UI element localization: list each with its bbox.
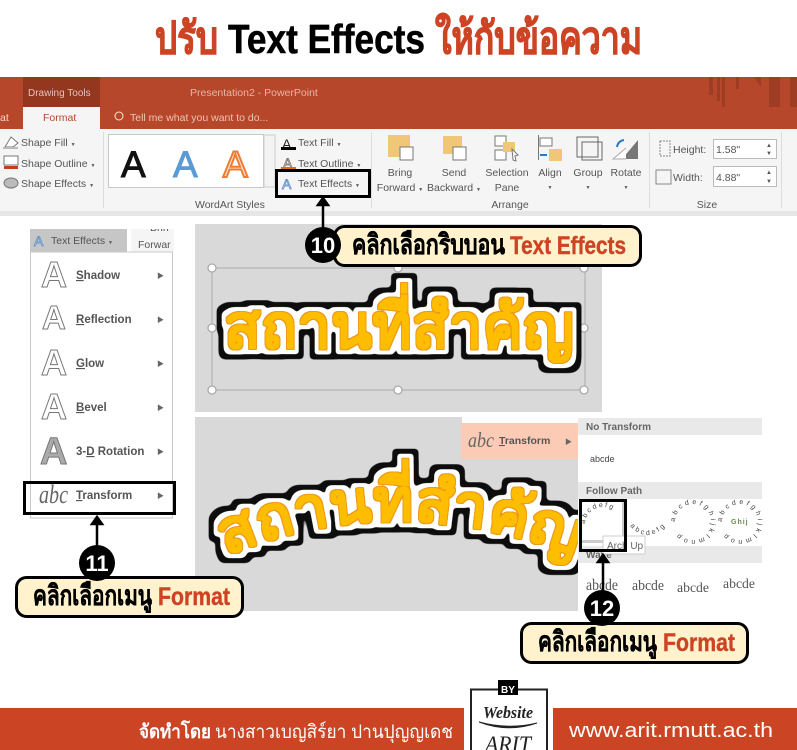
size group: ▲ [766, 170, 772, 176]
logo: Website ARIT badge [471, 680, 547, 750]
footer bar: จัดทำโดย [139, 720, 211, 743]
ribbon: PowerPoint Drawing Tools: at [0, 112, 9, 124]
size group: 1.58" [716, 144, 740, 156]
ribbon: PowerPoint Drawing Tools: Tell me what you want to do... [130, 112, 268, 124]
text fill, outline and effects commands: Text Fill ▼ [298, 137, 341, 149]
panel: Transform gallery: abcde [632, 578, 664, 594]
callout: step 11: คลิกเลือกเมนู [33, 580, 152, 613]
panel: Transform gallery: abcde [586, 577, 618, 594]
arrange group [377, 135, 642, 211]
left Text Effects dropdown menu: Forwar [138, 239, 171, 251]
panel: Transform menu highlight: ▶ [565, 438, 572, 446]
callout: step 11: 11 [85, 551, 109, 576]
panel: straight WordArt on gray slide: สถานที่สำคัญ [224, 284, 574, 362]
callout: step 11 [16, 545, 242, 616]
arrange group: Forward ▼ [377, 182, 423, 194]
highlight box: Arch Up option [580, 500, 626, 550]
title: ปรับ [155, 14, 218, 63]
left Text Effects dropdown menu: A [42, 299, 66, 336]
title: ให้กับข้อความ [435, 12, 642, 63]
panel: Transform gallery: No Transform [586, 422, 651, 433]
left Text Effects dropdown menu: A [41, 254, 67, 295]
panel: Transform gallery: abcdefg [630, 524, 665, 536]
panel: Transform gallery: Ghij [731, 519, 749, 526]
shape fill, outline and effects commands [3, 137, 265, 211]
shape fill, outline and effects commands: WordArt Styles [195, 199, 265, 211]
ribbon: PowerPoint Drawing Tools: Presentation2 - PowerPoint [190, 87, 318, 99]
callout: step 10: Text Effects [510, 232, 626, 260]
arrow: step 11 to Transform [92, 517, 102, 550]
arrow: step 12 to Arch Up [598, 555, 608, 595]
left Text Effects dropdown menu: ▶ [157, 404, 164, 412]
left Text Effects dropdown menu: Glow [76, 358, 104, 370]
panel: Transform menu highlight: abc [468, 428, 495, 452]
arrange group: ▼ [586, 185, 590, 191]
callout: step 10: คลิกเลือกริบบอน [352, 229, 505, 260]
left Text Effects dropdown menu: A [41, 386, 67, 427]
arrange group: Align [538, 167, 562, 179]
shape fill, outline and effects commands: Shape Effects ▼ [21, 178, 94, 190]
left Text Effects dropdown menu: A [41, 342, 67, 383]
left Text Effects dropdown menu: A [34, 233, 44, 249]
left Text Effects dropdown menu: abc [39, 480, 68, 509]
left Text Effects dropdown menu: Shadow [76, 270, 120, 282]
panel: straight WordArt on gray slide [195, 224, 602, 412]
arrange group: Bring [388, 167, 412, 179]
title: Text Effects [228, 16, 425, 62]
shape fill, outline and effects commands: Shape Outline ▼ [21, 158, 95, 170]
left Text Effects dropdown menu: ▶ [157, 448, 164, 456]
callout: step 12: Format [663, 629, 736, 657]
panel: Transform gallery: abcde [590, 454, 615, 464]
callout: step 11: Format [158, 583, 231, 611]
size group: ▼ [766, 179, 772, 185]
left Text Effects dropdown menu: Brin [150, 222, 169, 234]
left Text Effects dropdown menu [30, 222, 178, 518]
size group: 4.88" [716, 172, 740, 184]
size group: Width: [673, 172, 703, 184]
callout: step 12: คลิกเลือกเมนู [538, 626, 657, 659]
left Text Effects dropdown menu: ▶ [157, 360, 164, 368]
panel: Transform gallery: abcdefg [582, 502, 614, 524]
panel: Transform gallery: Follow Path [586, 486, 642, 497]
panel: Transform gallery: Wave [586, 550, 612, 561]
highlight box: Text Effects command [276, 170, 370, 196]
left Text Effects dropdown menu: A [40, 431, 67, 473]
callout: step 12 [522, 590, 748, 662]
text fill, outline and effects commands: Text Effects ▼ [298, 178, 360, 190]
panel: Transform menu highlight: Transform [499, 435, 550, 447]
logo: Website ARIT badge: BY [501, 685, 515, 696]
arrange group: ▼ [548, 185, 552, 191]
panel: Transform gallery: abcdefghijklmnop [718, 500, 763, 544]
left Text Effects dropdown menu: Text Effects ▼ [51, 235, 113, 247]
arrange group: Selection [485, 167, 529, 179]
arrange group: Send [442, 167, 466, 179]
text fill, outline and effects commands: A [282, 136, 292, 152]
tooltip: Arch Up: Arch Up [607, 541, 644, 552]
size group: Height: [673, 144, 706, 156]
size group [656, 140, 776, 211]
left Text Effects dropdown menu: Reflection [76, 314, 132, 326]
arrange group: Pane [495, 182, 519, 194]
callout: step 10: 10 [311, 233, 335, 258]
panel: arched WordArt on gray slide: สถานที่สำคัญ [208, 448, 578, 576]
arrange group: Arrange [491, 199, 529, 211]
panel: Transform menu highlight [461, 417, 578, 459]
left Text Effects dropdown menu: Transform [76, 490, 132, 502]
left Text Effects dropdown menu: ▶ [157, 316, 164, 324]
panel: Transform gallery: abcde [723, 577, 755, 592]
footer bar: นางสาวเบญสิร์ยา ปานปุญญเดช [215, 721, 453, 744]
logo: Website ARIT badge: Website [483, 703, 533, 722]
tooltip: Arch Up [603, 536, 645, 554]
left Text Effects dropdown menu: ▶ [157, 272, 164, 280]
shape fill, outline and effects commands: Shape Fill ▼ [21, 137, 76, 149]
text fill, outline and effects commands [281, 136, 361, 192]
ribbon: PowerPoint Drawing Tools: Format [43, 112, 76, 124]
arrange group: Backward ▼ [427, 182, 481, 194]
left Text Effects dropdown menu: ▶ [157, 492, 164, 500]
callout: step 10 [305, 226, 640, 266]
size group: ▼ [766, 151, 772, 157]
left Text Effects dropdown menu: Bevel [76, 402, 107, 414]
arrange group: Rotate [611, 167, 642, 179]
panel: Transform gallery [578, 418, 763, 596]
text fill, outline and effects commands: A [283, 155, 293, 171]
arrange group: ▼ [624, 185, 628, 191]
panel: Transform gallery: abcde [677, 581, 709, 596]
footer bar: www.arit.rmutt.ac.th [568, 720, 773, 742]
callout: step 12: 12 [590, 596, 614, 621]
WordArt gallery: A [223, 144, 248, 185]
panel: Transform gallery: abcdefghijklmnop [671, 500, 716, 544]
ribbon: PowerPoint Drawing Tools [0, 77, 797, 216]
text fill, outline and effects commands: A [282, 176, 292, 192]
WordArt gallery: A [121, 144, 146, 185]
title [155, 12, 642, 63]
left Text Effects dropdown menu: 3-D Rotation [76, 446, 144, 458]
WordArt gallery: A [173, 144, 198, 185]
ribbon: PowerPoint Drawing Tools: Drawing Tools [28, 88, 91, 99]
WordArt gallery [108, 134, 275, 188]
arrange group: Group [573, 167, 603, 179]
footer bar [0, 708, 797, 750]
size group: Size [697, 199, 717, 211]
highlight box: Transform menu item [24, 482, 174, 514]
size group: ▲ [766, 143, 772, 149]
panel: arched WordArt on gray slide [195, 417, 578, 611]
arrow: step 10 to Text Effects [318, 198, 328, 240]
text fill, outline and effects commands: Text Outline ▼ [298, 158, 361, 170]
